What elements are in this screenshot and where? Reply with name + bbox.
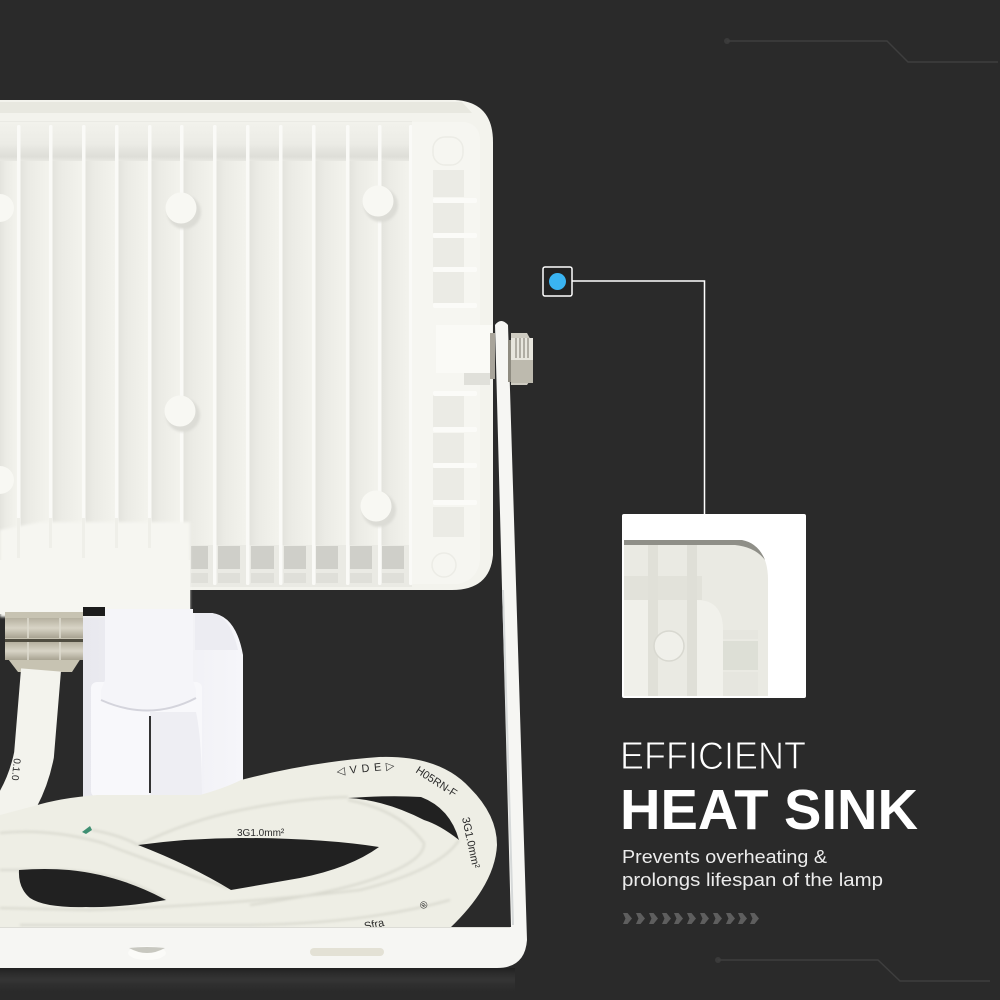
callout marker: blue dot (543, 267, 572, 296)
gland nut (5, 612, 83, 672)
heading: heat sink: HEAT SINK (620, 778, 918, 842)
decorative circuit line: bottom right (715, 957, 990, 981)
body text: Prevents overheating & (622, 847, 827, 867)
bolt and nut (490, 333, 533, 385)
right side frame (412, 122, 480, 584)
mounting bracket (0, 321, 527, 968)
body text: prolongs lifespan of the lamp (622, 870, 883, 890)
cable markings: H05RN-F (413, 764, 459, 800)
sensor body (83, 613, 243, 797)
body text (622, 847, 883, 890)
vertical fins (17, 125, 412, 585)
side slots (433, 170, 464, 537)
heat sink fin area (0, 121, 492, 587)
side mounting post (464, 373, 490, 385)
cable markings: 3G1.0mm² (459, 816, 482, 870)
cable markings: ® (418, 899, 431, 912)
cable markings: Sfra (363, 917, 386, 933)
housing outer shell (0, 100, 493, 590)
power cable from gland (0, 670, 41, 832)
vent openings at base of fins (191, 546, 404, 569)
cable strand shading (0, 797, 459, 925)
screw recesses (432, 137, 463, 577)
decorative circuit line: top right (724, 38, 998, 62)
lower pipes from housing (0, 518, 202, 797)
gaps between cable loops (19, 796, 459, 907)
sensor swivel base (91, 682, 202, 797)
fin bosses (0, 186, 398, 527)
coiled cable mass (0, 757, 497, 928)
floodlight back housing with heat sink (0, 100, 918, 968)
green wire tick (82, 826, 92, 834)
callout leader line (572, 281, 704, 514)
cable markings: 0.1.0 (9, 758, 22, 781)
cable markings: 3G1.0mm² (237, 828, 285, 839)
cable markings (9, 758, 482, 933)
cable markings: ◁VDE▷ (336, 760, 396, 778)
sensor neck (101, 609, 196, 711)
chevron row (623, 913, 759, 924)
floor reflection under bracket (0, 968, 515, 992)
heading: efficient: EFFICIENT (620, 735, 806, 778)
inset detail photo (622, 514, 806, 698)
bracket holes (128, 946, 166, 960)
